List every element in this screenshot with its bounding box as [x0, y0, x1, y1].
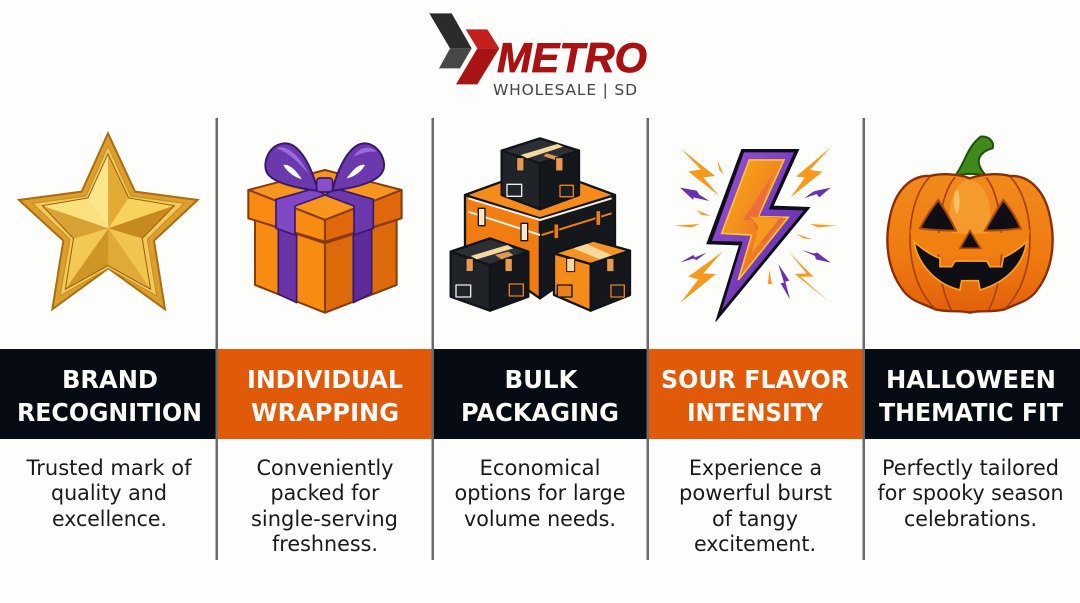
heading bar: bulk packaging: [434, 349, 647, 439]
description: bulk packaging: Economical: [480, 456, 600, 480]
icon: jack-o-lantern: [887, 136, 1053, 313]
description: brand recognition: [25, 456, 192, 531]
description: sour flavor intensity: Experience a: [689, 456, 822, 480]
logo wordmark: METRO: [497, 34, 647, 81]
logo tagline: WHOLESALE | SD: [493, 81, 637, 99]
heading bar: bulk packaging: PACKAGING: [461, 398, 619, 427]
heading bar: brand recognition: [0, 349, 216, 439]
description: halloween thematic fit: Perfectly tailored: [882, 456, 1059, 480]
panel: sour flavor intensity: [649, 147, 863, 556]
description: sour flavor intensity: of tangy: [712, 507, 798, 531]
description: sour flavor intensity: excitement.: [694, 532, 816, 556]
heading bar: individual wrapping: WRAPPING: [251, 398, 399, 427]
description: halloween thematic fit: celebrations.: [904, 507, 1037, 531]
icon: stacked boxes: [451, 138, 630, 311]
panel: individual wrapping: [218, 143, 432, 556]
description: sour flavor intensity: [679, 456, 832, 556]
icon: gold star: [19, 133, 198, 309]
description: brand recognition: Trusted mark of: [25, 456, 192, 480]
icon: lightning bolt: [674, 147, 837, 322]
description: brand recognition: excellence.: [52, 507, 167, 531]
heading bar: individual wrapping: INDIVIDUAL: [247, 365, 403, 394]
divider: [646, 118, 649, 560]
icon: gift box: [248, 143, 402, 313]
heading bar: brand recognition: RECOGNITION: [17, 398, 202, 427]
description: bulk packaging: [454, 456, 626, 531]
divider: [432, 118, 434, 560]
description: individual wrapping: Conveniently: [256, 456, 394, 480]
description: halloween thematic fit: [878, 456, 1064, 531]
divider: [216, 118, 218, 560]
heading bar: individual wrapping: [218, 349, 432, 439]
description: individual wrapping: [251, 456, 398, 556]
description: bulk packaging: volume needs.: [464, 507, 616, 531]
panel: brand recognition: [0, 133, 216, 531]
heading bar: halloween thematic fit: HALLOWEEN: [886, 365, 1056, 394]
description: sour flavor intensity: powerful burst: [679, 481, 832, 505]
description: individual wrapping: freshness.: [272, 532, 378, 556]
panel: bulk packaging: [434, 138, 647, 531]
panel: halloween thematic fit: [865, 136, 1080, 531]
logo: Metro Wholesale SD: [429, 13, 647, 99]
description: halloween thematic fit: for spooky season: [878, 481, 1064, 505]
description: brand recognition: quality and: [51, 481, 167, 505]
divider: [862, 118, 865, 560]
heading bar: sour flavor intensity: SOUR FLAVOR: [661, 365, 849, 394]
heading bar: halloween thematic fit: THEMATIC FIT: [879, 398, 1063, 427]
description: individual wrapping: single-serving: [251, 507, 398, 531]
description: individual wrapping: packed for: [270, 481, 380, 505]
heading bar: brand recognition: BRAND: [62, 365, 158, 394]
heading bar: sour flavor intensity: [649, 349, 863, 439]
heading bar: sour flavor intensity: INTENSITY: [687, 398, 824, 427]
description: bulk packaging: options for large: [454, 481, 626, 505]
heading bar: halloween thematic fit: [865, 349, 1080, 439]
icon: double chevron: [429, 13, 499, 84]
heading bar: bulk packaging: BULK: [504, 365, 579, 394]
